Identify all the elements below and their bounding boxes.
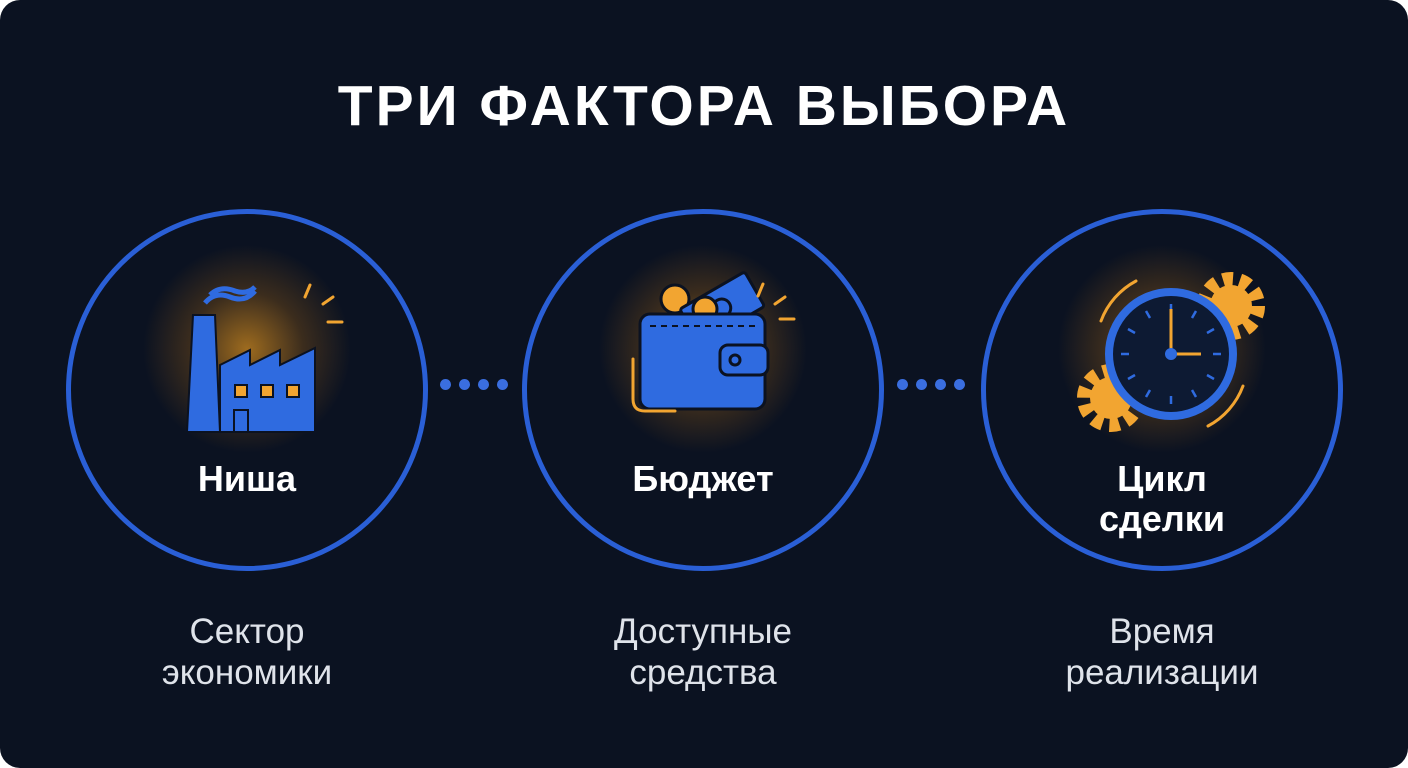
- text: funds: Доступные: [614, 612, 792, 651]
- text: time: Время: [1109, 612, 1215, 651]
- text: time: реализации: [1065, 653, 1259, 692]
- panel: niche: [66, 209, 428, 571]
- text: funds: [614, 612, 792, 692]
- label: Цикл сделки: сделки: [1099, 498, 1225, 539]
- label: Цикл сделки: [1099, 458, 1225, 539]
- icon: factory: [186, 284, 344, 433]
- icon: wallet: [632, 271, 796, 412]
- label: Ниша: Ниша: [198, 458, 296, 499]
- label: Цикл сделки: Цикл: [1117, 458, 1207, 499]
- icon: clock with gears: [1077, 272, 1265, 432]
- title: ТРИ ФАКТОРА ВЫБОРА: [338, 74, 1070, 138]
- connector dots 2: [897, 379, 965, 390]
- label: Бюджет: Бюджет: [632, 458, 774, 499]
- text: time: [1065, 612, 1259, 692]
- text: sector: экономики: [162, 653, 332, 692]
- text: funds: средства: [629, 653, 777, 692]
- panel: budget: [522, 209, 884, 571]
- connector dots 1: [440, 379, 508, 390]
- panel: deal cycle: [981, 209, 1343, 571]
- text: sector: [162, 612, 332, 692]
- text: sector: Сектор: [189, 612, 304, 651]
